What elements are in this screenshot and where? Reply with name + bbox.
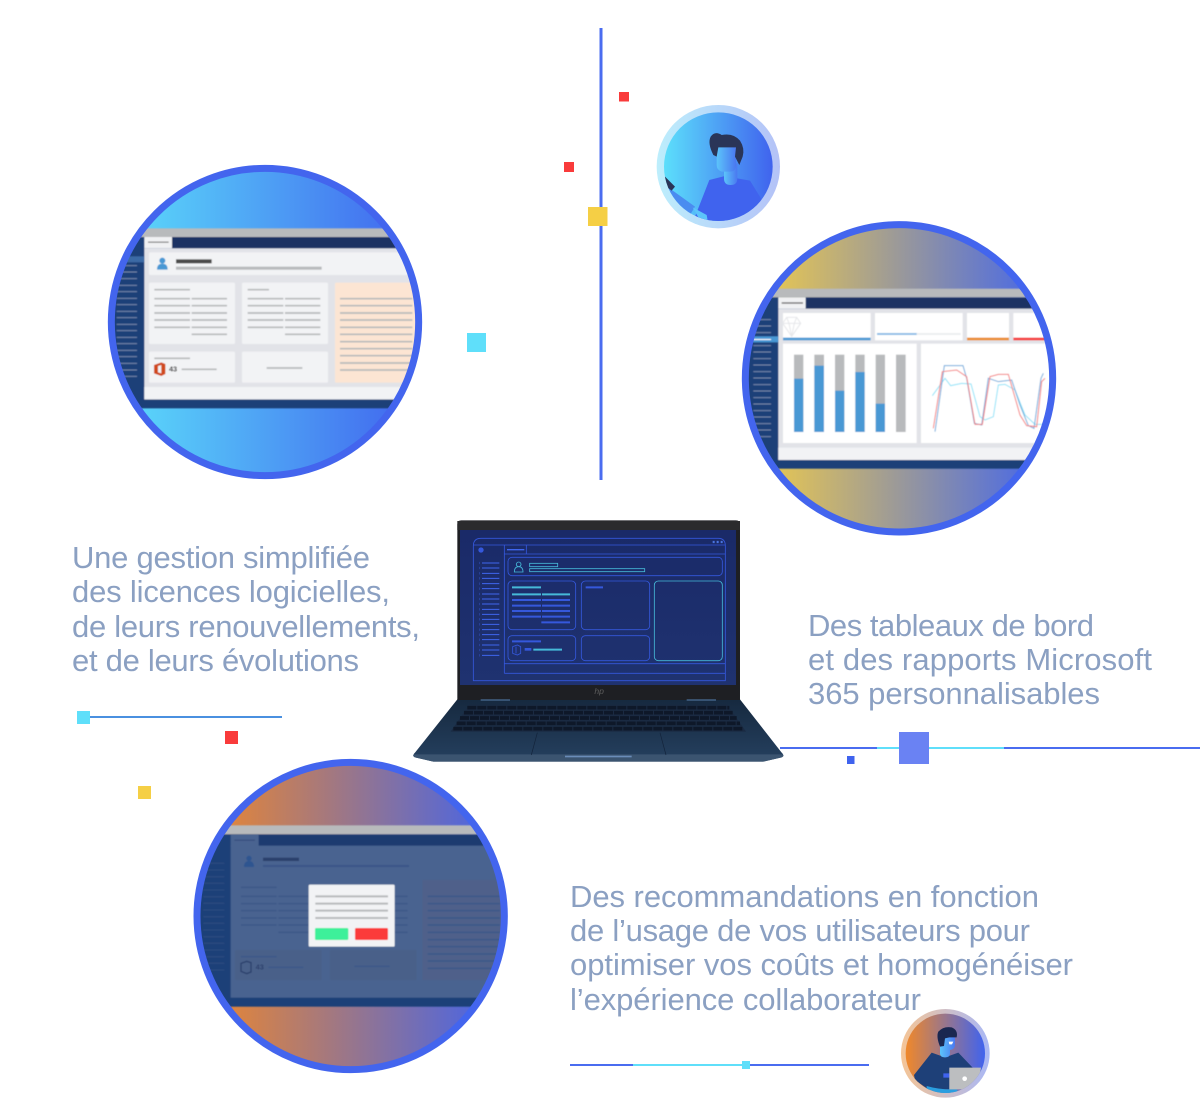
- small blue square: [847, 756, 854, 764]
- heading text: licence management: Une gestion simplifiée: [72, 540, 370, 575]
- heading text: recommendations: [570, 879, 1073, 1017]
- connector line bottom with cyan square: [570, 1061, 869, 1069]
- yellow square lower left: [138, 786, 151, 799]
- red square lower left: [225, 731, 238, 744]
- heading text: recommendations: optimiser vos coûts et homogénéiser: [570, 947, 1073, 982]
- screenshot: licence dashboard: [100, 228, 430, 408]
- panel: dashboards screenshot circle: [735, 225, 1065, 532]
- laptop lid: [457, 520, 740, 700]
- bar chart: [794, 355, 906, 432]
- screen interface outline: [473, 538, 725, 681]
- heading text: dashboards: Des tableaux de bord: [808, 608, 1094, 643]
- connector line right with square: [780, 732, 1200, 764]
- dialog box: [309, 885, 395, 947]
- heading text: licence management: des licences logicielles,: [72, 574, 390, 609]
- heading text: recommendations: Des recommandations en fonction: [570, 879, 1039, 914]
- panel: recommendations screenshot circle: [185, 762, 515, 1070]
- yellow square on line: [588, 207, 608, 226]
- red square top: [619, 92, 629, 102]
- connector line with cyan square: [77, 711, 282, 724]
- laptop base: [413, 699, 783, 762]
- heading text: licence management: [72, 540, 420, 678]
- icon: office: [154, 362, 165, 376]
- line chart: [932, 366, 1045, 432]
- dimmed licence count: 43: [256, 963, 264, 972]
- heading text: licence management: de leurs renouvellements,: [72, 609, 420, 644]
- heading text: dashboards: et des rapports Microsoft: [808, 642, 1152, 677]
- avatar: man with tablet: [657, 105, 780, 228]
- red square left of line: [564, 162, 574, 172]
- heading text: recommendations: l’expérience collaborateur: [570, 982, 921, 1017]
- heading text: dashboards: [808, 608, 1152, 711]
- heading text: licence management: et de leurs évolutions: [72, 643, 359, 678]
- licence count: 43: [169, 365, 177, 374]
- laptop screen: [460, 530, 736, 685]
- vertical timeline line: [600, 28, 602, 480]
- heading text: recommendations: de l’usage de vos utilisateurs pour: [570, 913, 1030, 948]
- avatar: man with laptop: [901, 1009, 990, 1098]
- screenshot: dimmed dashboard with dialog: [185, 825, 515, 1007]
- heading text: dashboards: 365 personnalisables: [808, 676, 1100, 711]
- panel: licence management screenshot circle: [100, 168, 430, 476]
- icon: diamond: [783, 317, 801, 336]
- laptop: [413, 520, 783, 762]
- screenshot: dashboards and charts: [735, 289, 1065, 469]
- laptop logo: hp: [594, 686, 604, 696]
- cyan square: [467, 333, 486, 352]
